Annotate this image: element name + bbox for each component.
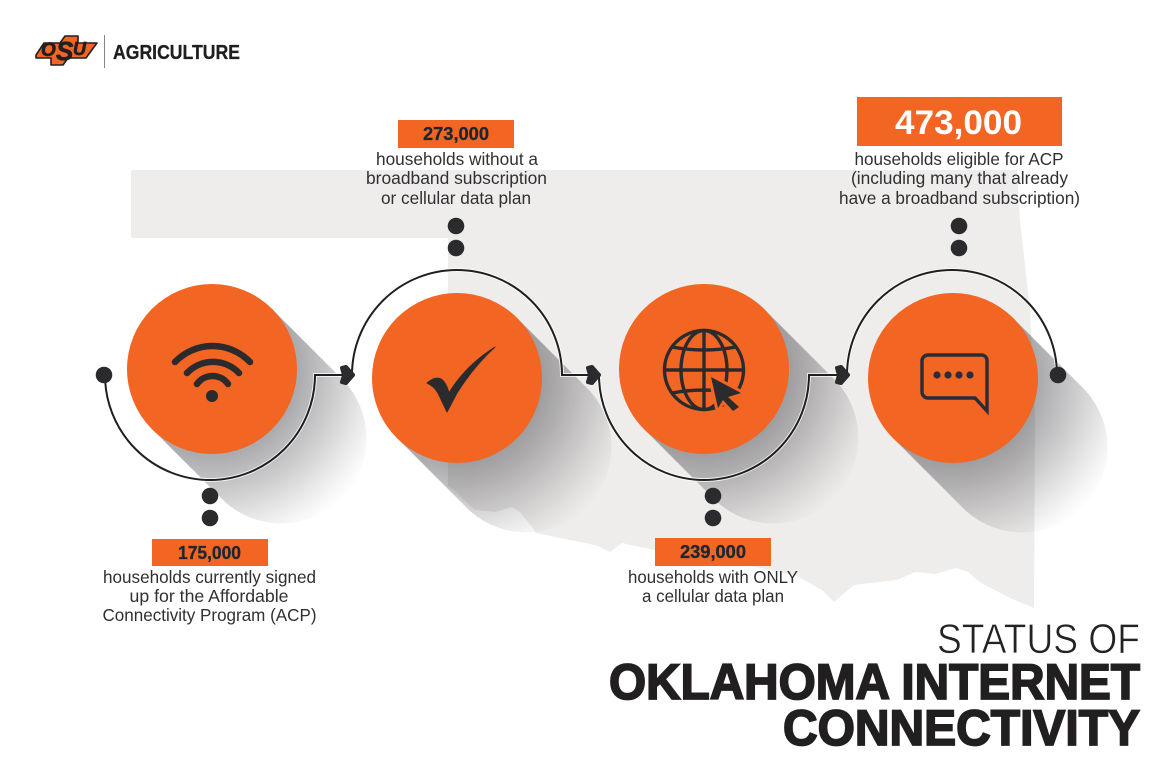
label: 473,000 eligible: 473,000	[895, 104, 1022, 142]
title: STATUS OF	[937, 615, 1140, 662]
label: 239,000 cellular only: a cellular data plan	[642, 586, 784, 606]
icon: speech bubble	[922, 355, 987, 411]
label: 273,000 no subscription: broadband subscription	[366, 168, 547, 188]
shadow: circle 1	[152, 309, 366, 523]
label: 175,000 signed up: Connectivity Program (ACP)	[102, 605, 316, 625]
connector dots: step 2	[448, 218, 464, 256]
icon: check mark	[427, 347, 495, 412]
logo: OSU Agriculture	[36, 35, 240, 68]
title: CONNECTIVITY	[783, 700, 1140, 756]
label: 175,000 signed up: 175,000	[178, 543, 241, 563]
label: 175,000 signed up: up for the Affordable	[130, 586, 288, 606]
icon: OSU mark	[36, 36, 97, 66]
label: 473,000 eligible: households eligible for ACP	[854, 149, 1064, 169]
shadow: circle 2	[397, 318, 611, 532]
map: Oklahoma silhouette	[131, 170, 1035, 608]
connector dots: step 3	[705, 488, 721, 526]
label: 239,000 cellular only: households with ONLY	[628, 567, 798, 587]
icon: OSU mark: S	[56, 36, 74, 66]
icon: OSU mark: U	[73, 39, 87, 59]
end dot	[1050, 367, 1066, 383]
circle: wifi	[127, 284, 297, 454]
connector dots: step 1	[202, 488, 218, 526]
circle: globe	[619, 284, 789, 454]
start dot	[96, 367, 112, 383]
icon: OSU mark: O	[41, 40, 56, 61]
icon: wifi	[175, 346, 250, 402]
label: 175,000 signed up	[102, 539, 316, 625]
title: OKLAHOMA INTERNET	[609, 654, 1140, 710]
circle: chat	[868, 293, 1038, 463]
arrow 1	[342, 367, 353, 383]
label: 175,000 signed up: households currently signed	[103, 567, 316, 587]
icon: globe with cursor	[664, 330, 744, 411]
label: 273,000 no subscription: households without a	[376, 149, 538, 169]
label: 239,000 cellular only	[628, 538, 798, 606]
connector: arcs and arrows	[105, 270, 1057, 480]
label: 239,000 cellular only: 239,000	[680, 542, 746, 562]
connector dots: step 4	[951, 218, 967, 256]
label: 473,000 eligible: have a broadband subscription)	[839, 188, 1080, 208]
long shadows	[152, 309, 1107, 532]
label: 273,000 no subscription: 273,000	[423, 124, 489, 144]
shadow: circle 3	[644, 309, 858, 523]
shadow: circle 4	[893, 318, 1107, 532]
logo wordmark: AGRICULTURE	[113, 42, 240, 64]
label: 273,000 no subscription: or cellular data plan	[381, 188, 531, 208]
title	[609, 615, 1140, 756]
label: 473,000 eligible: (including many that already	[851, 168, 1068, 188]
circle: check	[372, 293, 542, 463]
label: 473,000 eligible	[839, 97, 1080, 208]
arrow 3	[837, 367, 848, 383]
label: 273,000 no subscription	[366, 120, 547, 208]
logo divider	[104, 35, 105, 68]
arrow 2	[588, 367, 599, 383]
